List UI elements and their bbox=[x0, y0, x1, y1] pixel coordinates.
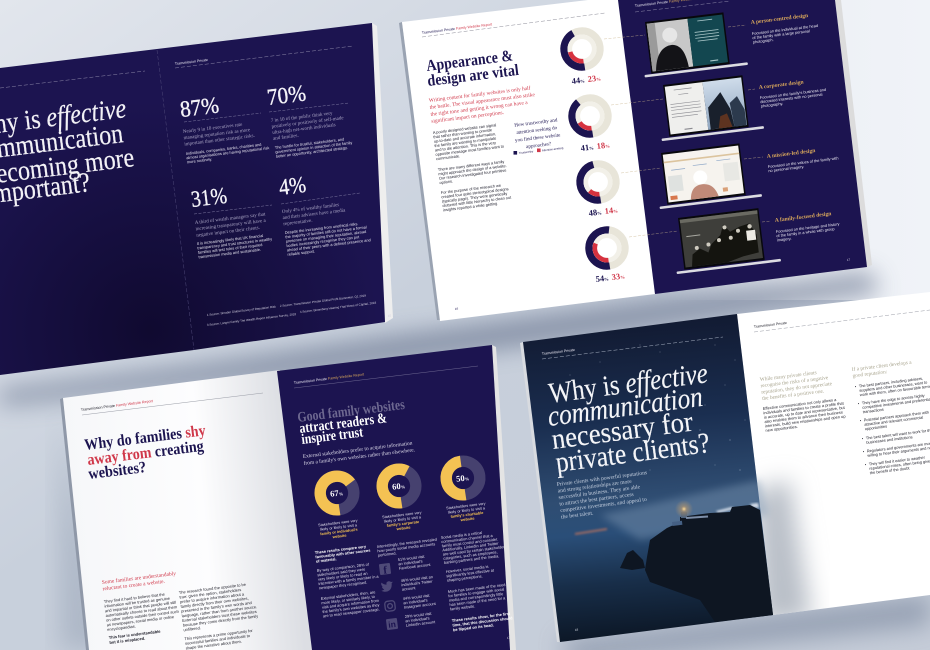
running header left page: Transmission Private Family Website Report bbox=[81, 399, 153, 412]
stat: 87%: 87% bbox=[179, 92, 220, 122]
body copy: also enables them to advance their business bbox=[764, 410, 843, 424]
donut: 41% 18% bbox=[570, 96, 610, 136]
text column one: stakeholders said they were bbox=[317, 567, 366, 577]
stat: 31%: transmission media and sustainable. bbox=[198, 247, 261, 259]
heading: Why do families shy bbox=[83, 422, 207, 454]
text column two with social stats: 46% would visit an bbox=[401, 574, 433, 583]
laptop: corporate design bbox=[655, 73, 764, 141]
body copy: insights reported a while getting bbox=[443, 201, 498, 212]
design title and note: family-focused: imagery. bbox=[777, 236, 792, 243]
intro text: and strong relationships are more bbox=[557, 479, 633, 495]
stat: 4%: the majority of families still do not have a formal bbox=[285, 224, 367, 239]
text column one: External stakeholders, then, are bbox=[321, 589, 376, 601]
stat: 31% bbox=[190, 183, 274, 259]
red intro text: the battle. The visual appearance must also strike bbox=[429, 92, 536, 111]
donut captions: website bbox=[331, 534, 347, 539]
text column three: be flipped on its head. bbox=[453, 622, 494, 632]
body copy: cluttered with little hierarchy to clean out bbox=[442, 195, 512, 208]
text column one bbox=[315, 543, 380, 618]
bullet list: • bbox=[858, 401, 860, 406]
body copy: created four quite stereotypical designs bbox=[441, 186, 509, 199]
donut captions: website bbox=[459, 517, 475, 522]
stat: 31%: A third of wealth managers say that bbox=[195, 212, 266, 226]
design title and note: family-focused bbox=[775, 211, 841, 243]
heading: necessary for bbox=[550, 406, 695, 456]
heading: private clients? bbox=[554, 427, 712, 479]
heading right page: attract readers & bbox=[299, 410, 388, 437]
running header: Transmission Private Family Website Report bbox=[422, 22, 492, 35]
bullet list: • bbox=[863, 449, 865, 454]
stat: 31%: increasing transparency will have a bbox=[195, 219, 267, 232]
stat: 87%: almost organisations are having reputational risk bbox=[186, 145, 270, 160]
stat: 31%: families will test rules of their required bbox=[198, 242, 263, 255]
text column two with social stats: how poorly social media accounts bbox=[377, 541, 435, 553]
design title and note: person-centred: of the family with a large personal bbox=[752, 28, 810, 40]
donut captions: likely or likely to visit a bbox=[384, 515, 422, 524]
body copy: For the purpose of the research we bbox=[441, 183, 501, 195]
stat: 4%: and their advisors have a media bbox=[282, 208, 346, 221]
bullet list: opportunities bbox=[865, 424, 887, 431]
stat: 4%: presence on managing their reputation, abroad bbox=[286, 229, 366, 244]
stat: 4%: representative. bbox=[283, 219, 313, 227]
text column three: However, social media is bbox=[446, 564, 489, 574]
text column one: newspaper they recognised. bbox=[319, 580, 368, 590]
icon: facebook: f bbox=[383, 564, 388, 577]
running header right page: Transmission Private Family Website Report bbox=[294, 372, 364, 385]
body copy: the family are wanting to manipulate bbox=[434, 136, 497, 148]
body column one: encyclopaedias. bbox=[107, 624, 136, 632]
heading bbox=[546, 357, 712, 479]
footnotes: 3 Source: Langer Family The Wealth Report Influence Survey, 2018 bbox=[207, 312, 297, 327]
stat: 4%: reliable support. bbox=[287, 248, 315, 257]
body column one: as newspapers, social media or online bbox=[106, 614, 175, 627]
text column one: of material. bbox=[316, 556, 337, 564]
heading: why is effective communication bbox=[0, 93, 136, 210]
donut captions: likely or likely to visit a bbox=[448, 506, 486, 515]
design title and note: person-centred: Focussed on the individual at the head bbox=[752, 23, 818, 36]
question: approaches? bbox=[526, 141, 552, 150]
bullet list: They will find it easier to weather bbox=[868, 455, 926, 467]
footnotes: 2 Source: Transmission Private Global Profit Barometer, Q1 2019 bbox=[280, 293, 367, 308]
heading right page: Good family websites bbox=[297, 397, 406, 426]
bullet list: work with them, often on favourable terms bbox=[860, 383, 930, 397]
body column one: automatically choose to read about them bbox=[105, 604, 178, 618]
taupe intro text: the benefits of a positive one. bbox=[762, 387, 824, 402]
body column one: They find it hard to believe that the bbox=[104, 591, 166, 604]
donut value labels: 44% 23% bbox=[571, 72, 602, 86]
red intro text: Some families are understandably bbox=[101, 570, 177, 586]
question: you find these website bbox=[515, 131, 562, 144]
donut captions: family's charitable bbox=[450, 511, 484, 519]
body copy: There are many different ways a family bbox=[438, 159, 505, 172]
design title and note: corporate bbox=[759, 79, 827, 109]
donut: 50%: 50% bbox=[456, 472, 470, 484]
text column three: significantly less effective at bbox=[446, 567, 495, 578]
body column one: and impartial or think that people will still bbox=[105, 600, 176, 613]
stat: 4%: 4% bbox=[278, 172, 307, 200]
taupe column title: If a private client develops a bbox=[851, 359, 913, 373]
bullet list: Potential partners approach them with bbox=[863, 410, 929, 423]
design title and note: family-focused: A family-focused design bbox=[775, 211, 833, 224]
donut: 60% bbox=[380, 467, 418, 505]
donut captions: Stakeholders were very bbox=[382, 511, 422, 519]
taupe intro text: recognise the risks of a negative bbox=[760, 374, 829, 389]
stat: 87%: important than other strategic risks. bbox=[184, 134, 255, 147]
laptop: mission-led design bbox=[653, 141, 762, 209]
bold statement: This fear is understandable bbox=[109, 629, 162, 640]
footnotes bbox=[207, 293, 392, 327]
bullet list: businesses and institutions bbox=[866, 434, 913, 445]
donut value labels: 48% 14% bbox=[588, 204, 619, 218]
body column two: language, rather than from another source. bbox=[181, 604, 257, 618]
body copy: might approach the design of a website. bbox=[438, 163, 507, 176]
design title and note: mission-led: Focussed on the values of the family with bbox=[768, 155, 839, 169]
bullet list: They have the edge to access highly bbox=[861, 393, 925, 406]
body column two: because they come directly from the family bbox=[183, 613, 258, 628]
stat: 70% bbox=[266, 80, 353, 159]
legend: Attention-seeking bbox=[542, 146, 564, 152]
heading right page: inspire trust bbox=[301, 425, 364, 448]
donut captions bbox=[318, 502, 488, 541]
footnotes: 15 bbox=[388, 314, 392, 318]
spread: why is effective communication necessary for private clients bbox=[520, 292, 930, 642]
bullet list: The best partners, including advisers, bbox=[858, 376, 923, 389]
text column three: banking partners and the media. bbox=[444, 553, 500, 565]
stat: 87%: Individuals, companies, banks, charities and bbox=[186, 142, 262, 156]
page number: 16 bbox=[455, 307, 459, 311]
question: How trustworthy and bbox=[514, 117, 558, 129]
text column two with social stats: 51% would visit bbox=[398, 554, 426, 562]
text column one: By way of comparison, 28% of bbox=[317, 562, 370, 573]
bullet list: transactions bbox=[863, 407, 884, 414]
design title and note: corporate: discussed interests with no personal bbox=[760, 92, 823, 104]
donut captions: family's corporate bbox=[387, 520, 419, 528]
bullet list: suppliers and other businesses, want to bbox=[859, 380, 927, 393]
body column two: unfiltered. bbox=[183, 625, 201, 632]
intro text: External stakeholders prefer to acquire information bbox=[302, 440, 413, 460]
text column two with social stats: Facebook account bbox=[399, 562, 432, 571]
donut captions: family or individual's bbox=[320, 528, 358, 536]
text column two with social stats: Instagram account bbox=[404, 601, 437, 610]
stat: 4%: ahead of their peers with a defined presence and bbox=[287, 237, 371, 252]
heading: away from creating bbox=[86, 438, 205, 469]
text column one: the family's own websites as they bbox=[322, 602, 380, 614]
stat: 4%: bodies increasingly recognise they can put bbox=[286, 234, 360, 248]
bullet list bbox=[855, 375, 930, 476]
footnotes: 4 Source: Bloomberg Hearing That Flows of Capital, 2018 bbox=[300, 301, 377, 314]
text column two with social stats: an individual's bbox=[398, 558, 423, 566]
intro text: the best talent. bbox=[561, 510, 594, 521]
taupe intro text: reputation, they do not appreciate bbox=[761, 381, 833, 396]
text column one: visit and acquire information from bbox=[322, 598, 379, 610]
body copy: Our research investigated four primitive bbox=[439, 167, 507, 181]
red intro text: Writing content for family websites is only half bbox=[428, 85, 531, 104]
text column one: interview with a family member in a bbox=[318, 574, 380, 586]
design title and note: corporate: photography. bbox=[761, 101, 783, 109]
text column one: These results compare very bbox=[315, 544, 367, 555]
donut: 50% bbox=[444, 459, 482, 497]
stat: 87%: managing reputation risk as more bbox=[183, 128, 251, 141]
body copy: A poorly designed website can signal bbox=[433, 122, 497, 135]
stat: 70%: The hurdle for trustful, stakeholders, and bbox=[275, 137, 344, 150]
stat: 70%: better an opportunity, architected strategy. bbox=[276, 145, 348, 159]
text column two with social stats: Interestingly, the research revealed bbox=[377, 537, 437, 549]
text column three: These results show, for the first bbox=[452, 611, 511, 623]
donut value labels bbox=[571, 72, 626, 284]
heading: Why is effective bbox=[547, 357, 710, 410]
text column two with social stats: an individual's bbox=[405, 615, 430, 623]
stat: 70%: government opinion in attraction of the family bbox=[275, 140, 353, 154]
body column two: External stakeholders trust these websites bbox=[182, 609, 257, 623]
heading: communication bbox=[546, 381, 705, 433]
text column three: shaping perceptions. bbox=[447, 573, 483, 583]
stat: 70%: 7 in 10 of the public think very bbox=[271, 111, 333, 124]
bullet list: • bbox=[860, 418, 862, 423]
body copy: (typically page). They were genetically bbox=[442, 191, 508, 204]
page number: 17 bbox=[847, 258, 851, 262]
donut: 60%: 60% bbox=[392, 480, 406, 492]
running header: Transmission Private bbox=[542, 348, 575, 356]
donut captions: Stakeholders were very bbox=[318, 519, 358, 527]
donut: 67% bbox=[318, 474, 356, 512]
red intro text: significant impact on perceptions. bbox=[431, 109, 504, 125]
legend: Trustworthy bbox=[519, 149, 534, 155]
donut: 67%: 67% bbox=[330, 487, 344, 499]
text column three: family website. bbox=[450, 603, 476, 611]
connector lines bbox=[604, 25, 771, 237]
body copy: is accurate, up to date and representative, but bbox=[764, 405, 846, 420]
body copy: Effective communication not only allows a bbox=[763, 397, 837, 411]
text column one: more likely, or similarly likely, to bbox=[321, 594, 375, 605]
page number: 18 bbox=[575, 628, 579, 632]
stat: 87%: more routinely. bbox=[187, 156, 212, 165]
laptop: person-centred design bbox=[638, 10, 748, 78]
body copy: that rather than wanting to provide bbox=[433, 127, 492, 139]
bullet list: the benefit of the doubt bbox=[870, 465, 911, 475]
stat: 4%: Despite the increasing from unethical risks bbox=[285, 221, 358, 235]
body column two: prefer to acquire information about a bbox=[180, 591, 245, 604]
bullet list: • bbox=[865, 462, 867, 467]
heading: Appearance & bbox=[425, 47, 514, 75]
bold statement: but it is misplaced. bbox=[109, 636, 145, 645]
text column three: Additionally, LinkedIn and Twitter bbox=[442, 541, 499, 552]
text column three: media and correspondingly little bbox=[449, 591, 504, 603]
red intro text: reluctant to create a website. bbox=[102, 579, 166, 592]
intro text: successful in business. They are able bbox=[558, 483, 641, 501]
intro text: competitive investments, and appeal to bbox=[560, 497, 647, 514]
text column three: for families to engage with social bbox=[448, 587, 505, 598]
body copy bbox=[433, 122, 513, 212]
text column two with social stats bbox=[377, 537, 438, 630]
body column one: information will be trusted as genuine bbox=[104, 596, 171, 609]
text column three: categories, such as employees, bbox=[443, 549, 498, 561]
body copy: communicate. bbox=[436, 153, 460, 161]
bullet list: • bbox=[855, 384, 857, 389]
running header white page: Transmission Private bbox=[754, 321, 787, 329]
intro text: from a family's own websites rather than elsewhere. bbox=[303, 446, 415, 467]
legend bbox=[514, 146, 564, 155]
text column one: very likely or likely to read an bbox=[318, 571, 368, 582]
body column two: presented in the family's own words and bbox=[181, 600, 252, 614]
text column three: time, that this discussion should bbox=[452, 615, 513, 628]
design title and note: mission-led: A mission-led design bbox=[767, 148, 817, 160]
heading bbox=[425, 47, 520, 90]
text column two with social stats: performed. bbox=[378, 550, 397, 558]
text column one: are to read newspaper coverage. bbox=[323, 607, 380, 618]
donut captions: Stakeholders were very bbox=[446, 502, 486, 510]
heading: websites? bbox=[87, 459, 147, 483]
body copy: options. bbox=[439, 178, 453, 185]
body column one: on other outlets outside their control such bbox=[106, 609, 179, 623]
running header: Transmission Private bbox=[175, 58, 208, 66]
body copy: opposite message most families want to bbox=[435, 143, 504, 157]
photo: lighthouse at night bbox=[523, 314, 773, 642]
stat: 31%: transparency and trust structures in wealthy bbox=[197, 236, 272, 250]
stat: 87%: Nearly 9 in 10 executives rate bbox=[183, 123, 243, 135]
text column two with social stats: 29% would visit bbox=[405, 611, 433, 619]
design title and note: person-centred bbox=[751, 13, 819, 45]
design title and note: family-focused: of the family in a whole with group bbox=[776, 226, 835, 238]
text column two with social stats: an individual's bbox=[403, 597, 428, 605]
design title and note: family-focused: Focussed on the heritage and history bbox=[776, 221, 840, 234]
spread: why is effective communication becoming more important bbox=[0, 23, 393, 375]
heading right page bbox=[297, 397, 406, 448]
text column three: Social media is a critical bbox=[441, 530, 482, 540]
taupe column title: good reputation: bbox=[852, 369, 888, 379]
design title and note: corporate: A corporate design bbox=[759, 79, 805, 91]
taupe intro text: While many private clients bbox=[760, 370, 817, 383]
footnotes: 1 Source: Shrader Global Survey of Reputation Risk bbox=[207, 305, 276, 317]
stat: 31%: It is increasingly likely that UK financial bbox=[197, 233, 264, 246]
icon: twitter bbox=[380, 581, 394, 592]
bullet list: attractive and relevant commercial bbox=[864, 415, 924, 427]
design title and note: mission-led bbox=[767, 148, 839, 173]
stat: 70%: positively or positively of self-made bbox=[271, 116, 345, 130]
bullet list: • bbox=[862, 436, 864, 441]
design title and note: corporate: Focussed on the family's business and bbox=[760, 87, 826, 100]
body column two: successful families and individuals to bbox=[185, 633, 251, 646]
body copy: interests, build new relationships and open up bbox=[765, 414, 847, 428]
heading: design are vital bbox=[426, 62, 520, 90]
design title and note: mission-led: no personal imagery. bbox=[768, 164, 804, 173]
text column two with social stats: LinkedIn account bbox=[406, 619, 436, 628]
text column one: favourably with other sources bbox=[315, 548, 371, 559]
design title and note: person-centred: photograph. bbox=[753, 37, 774, 45]
stat: 31%: 31% bbox=[190, 183, 228, 212]
stat: 70%: 70% bbox=[266, 80, 307, 110]
body copy: new opportunities. bbox=[765, 424, 798, 433]
donut captions: likely or likely to visit a bbox=[320, 523, 358, 532]
heading bbox=[83, 422, 207, 483]
body column two: The research found the opposite to be bbox=[179, 582, 247, 595]
text column three: has been made of the need for a bbox=[449, 595, 506, 607]
stat: 4%: Only 4% of wealthy families bbox=[282, 203, 340, 215]
body column two: family directly from their own websites, bbox=[180, 596, 249, 609]
text column three: are well used by certain stakeholder bbox=[443, 544, 505, 557]
bullet list: competitive investments and preferential bbox=[862, 396, 930, 410]
donut value labels: 54% 33% bbox=[595, 270, 626, 284]
stat: 70%: ultra-high net-worth individuals bbox=[272, 123, 336, 136]
donut value labels: 41% 18% bbox=[580, 139, 611, 153]
icon: linkedin: in bbox=[388, 619, 396, 630]
donut: 44% 23% bbox=[562, 29, 602, 69]
spread: appearance and design are vital bbox=[399, 0, 872, 321]
body column two: true: given the option, stakeholders bbox=[179, 587, 241, 600]
design title and note: person-centred: A person-centred design bbox=[751, 13, 809, 26]
donut: 54% 33% bbox=[587, 228, 627, 268]
donut: 48% 14% bbox=[578, 162, 618, 202]
body copy: and to die attention. This is the very bbox=[435, 140, 496, 152]
stat: 87% bbox=[179, 92, 270, 165]
text column three bbox=[441, 527, 514, 632]
text column two with social stats: account bbox=[402, 585, 417, 592]
spread: why do families shy away bbox=[60, 345, 516, 650]
laptop: family-focused design bbox=[670, 206, 781, 274]
text column two with social stats: 44% would visit bbox=[403, 593, 431, 601]
icon: instagram bbox=[384, 600, 396, 612]
body copy: up-to-date and accurate information, bbox=[434, 131, 496, 144]
text column two with social stats: individual's Twitter bbox=[401, 578, 434, 587]
intro text: Private clients with powerful reputations bbox=[556, 469, 648, 488]
stat: 70%: and families. bbox=[273, 134, 299, 142]
body column two: This represents a prime opportunity for bbox=[184, 628, 254, 641]
text column three: Much has been made of the need bbox=[448, 582, 506, 594]
intro text: to attract the best partners, access bbox=[559, 492, 634, 508]
page number: 17 bbox=[507, 636, 511, 640]
text column three: family must control and consider. bbox=[442, 536, 498, 548]
red intro text: the right tone and getting it wrong can have a bbox=[430, 100, 529, 118]
stat: 31%: negative impact on their clients. bbox=[196, 226, 260, 239]
stat: 4% bbox=[278, 172, 372, 257]
body copy: individuals and families to create a profile that bbox=[763, 400, 845, 415]
text column three: communication channel that a bbox=[441, 533, 494, 544]
donut captions: website bbox=[395, 526, 411, 531]
question: attention seeking do bbox=[516, 125, 558, 136]
